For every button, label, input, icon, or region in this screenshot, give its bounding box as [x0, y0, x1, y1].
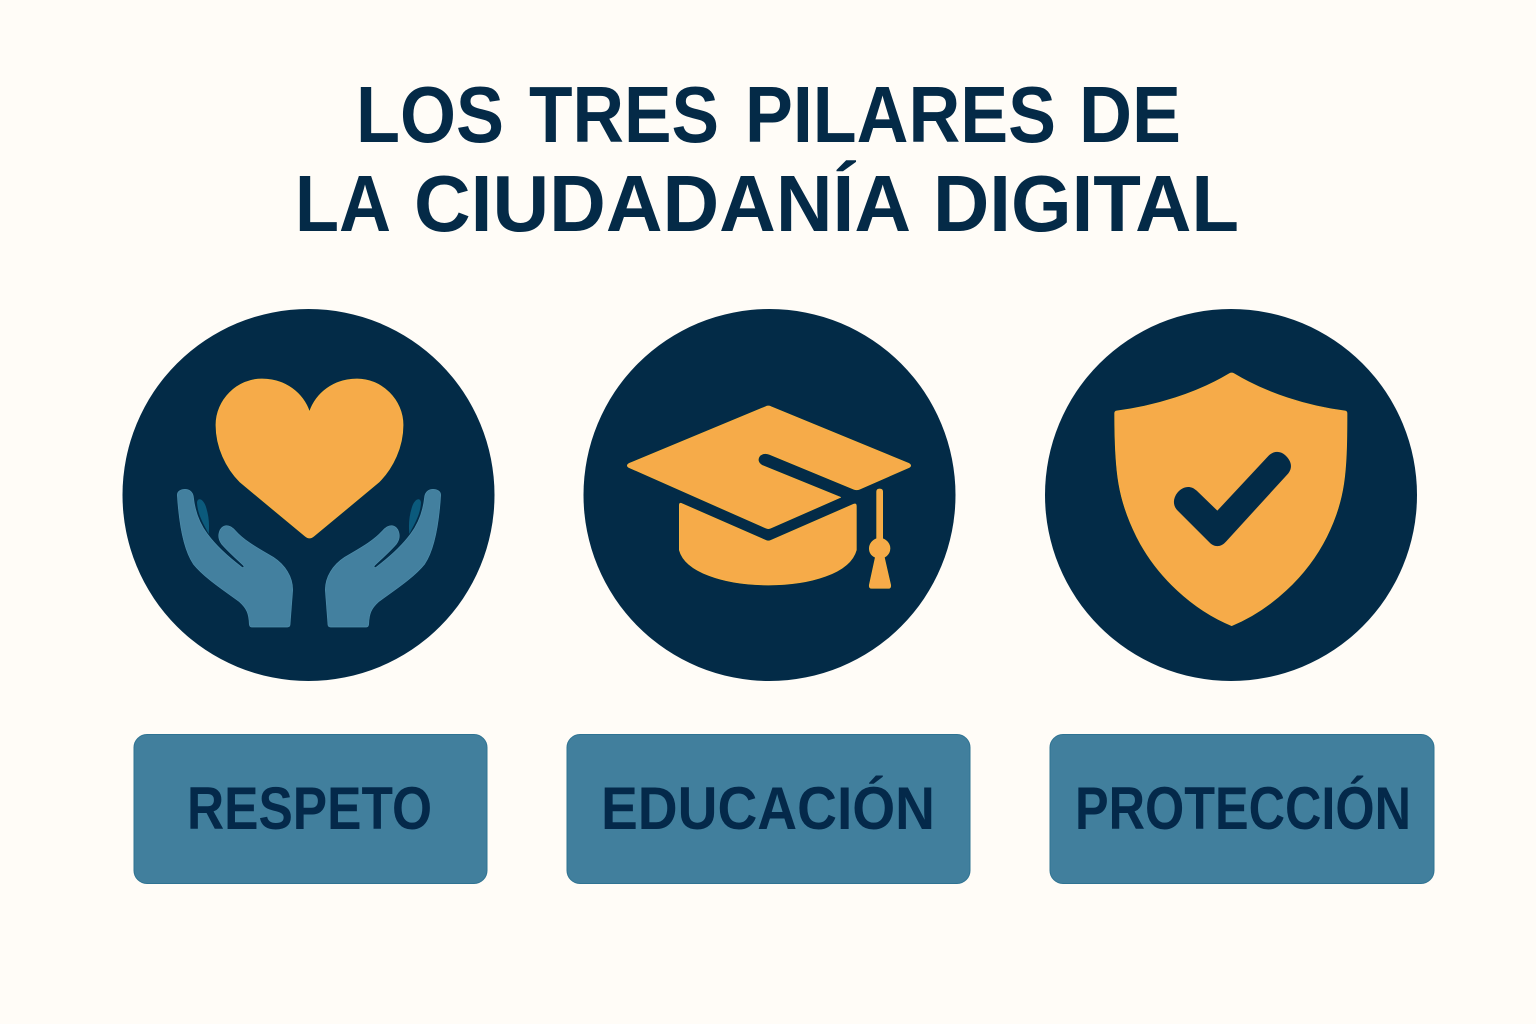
label: educación: [567, 734, 970, 884]
icon: graduation cap: [627, 406, 911, 588]
title: PILARES: [745, 70, 1056, 159]
panel: educación icon: [584, 309, 956, 681]
icon: hands: [177, 489, 441, 627]
title: [295, 70, 1239, 248]
title: DE: [1079, 70, 1181, 159]
label: respeto: RESPETO: [187, 775, 432, 842]
panel: protección icon: [1045, 309, 1417, 681]
title: DIGITAL: [933, 159, 1239, 248]
title: CIUDADANÍA: [414, 159, 911, 248]
label: protección: PROTECCIÓN: [1075, 775, 1411, 842]
title: TRES: [529, 70, 719, 159]
label: respeto: [134, 734, 487, 884]
icon: shield with check: [1115, 373, 1347, 626]
icon: heart: [216, 379, 403, 538]
title: LA: [295, 159, 391, 248]
label: educación: EDUCACIÓN: [601, 775, 935, 842]
title: LOS: [356, 70, 504, 159]
panel: respeto icon: [122, 309, 494, 681]
label: protección: [1050, 734, 1434, 884]
